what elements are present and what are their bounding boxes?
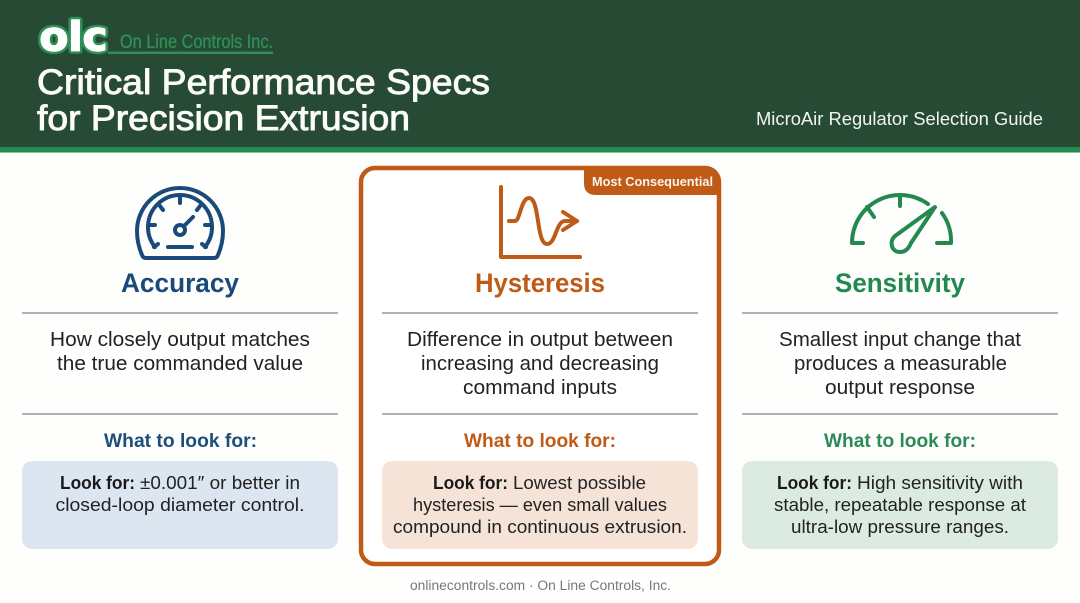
panel: sensitivity (742, 195, 1058, 549)
description: sensitivity (779, 329, 1021, 399)
description: sensitivity: produces a measurable (794, 353, 1007, 375)
subheading: hysteresis: What to look for: (464, 431, 616, 452)
logo: On Line Controls Inc. (120, 32, 273, 53)
description: accuracy: How closely output matches (50, 329, 310, 351)
callout: hysteresis: Look for: (433, 473, 508, 493)
panel: accuracy (22, 188, 338, 549)
callout: sensitivity: stable, repeatable response at (774, 495, 1026, 515)
icon: hysteresis curve (501, 187, 580, 257)
description: sensitivity: output response (825, 377, 975, 399)
description: hysteresis: Difference in output between (407, 329, 673, 351)
subheading: accuracy: What to look for: (104, 431, 257, 452)
callout: hysteresis: compound in continuous extrusion. (393, 517, 687, 537)
heading: accuracy: Accuracy (121, 268, 239, 298)
badge: most consequential: Most Consequential (592, 175, 713, 189)
logo: olc (40, 14, 108, 60)
description: sensitivity: Smallest input change that (779, 329, 1021, 351)
title (37, 63, 490, 138)
description: hysteresis (407, 329, 673, 399)
callout: sensitivity: ultra-low pressure ranges. (791, 517, 1009, 537)
callout: hysteresis: hysteresis — even small values (413, 495, 667, 515)
description: accuracy: the true commanded value (57, 353, 303, 375)
panel: hysteresis (361, 167, 720, 564)
icon: sensitivity gauge (852, 195, 951, 252)
callout: hysteresis (382, 461, 698, 549)
callout: accuracy: closed-loop diameter control. (56, 495, 304, 515)
subtitle: MicroAir Regulator Selection Guide (756, 109, 1043, 129)
header band (0, 0, 1080, 152)
title: Critical Performance Specs (37, 63, 490, 102)
callout: accuracy (22, 461, 338, 549)
description: hysteresis: command inputs (463, 377, 617, 399)
callout: accuracy: Look for: (60, 473, 135, 493)
callout: sensitivity: High sensitivity with (857, 473, 1023, 493)
description: accuracy (50, 329, 310, 375)
logo: olc (40, 14, 108, 60)
heading: sensitivity: Sensitivity (835, 268, 965, 298)
icon: accuracy gauge (137, 188, 223, 258)
title: for Precision Extrusion (37, 99, 410, 138)
description: hysteresis: increasing and decreasing (421, 353, 659, 375)
badge: most consequential (584, 167, 720, 195)
callout: sensitivity: Look for: (777, 473, 852, 493)
footer: onlinecontrols.com · On Line Controls, Inc. (410, 578, 671, 593)
subheading: sensitivity: What to look for: (824, 431, 976, 452)
logo (40, 14, 273, 60)
heading: hysteresis: Hysteresis (475, 268, 605, 298)
callout: sensitivity (742, 461, 1058, 549)
callout: hysteresis: Lowest possible (513, 473, 646, 493)
callout: accuracy: ±0.001″ or better in (140, 473, 300, 493)
